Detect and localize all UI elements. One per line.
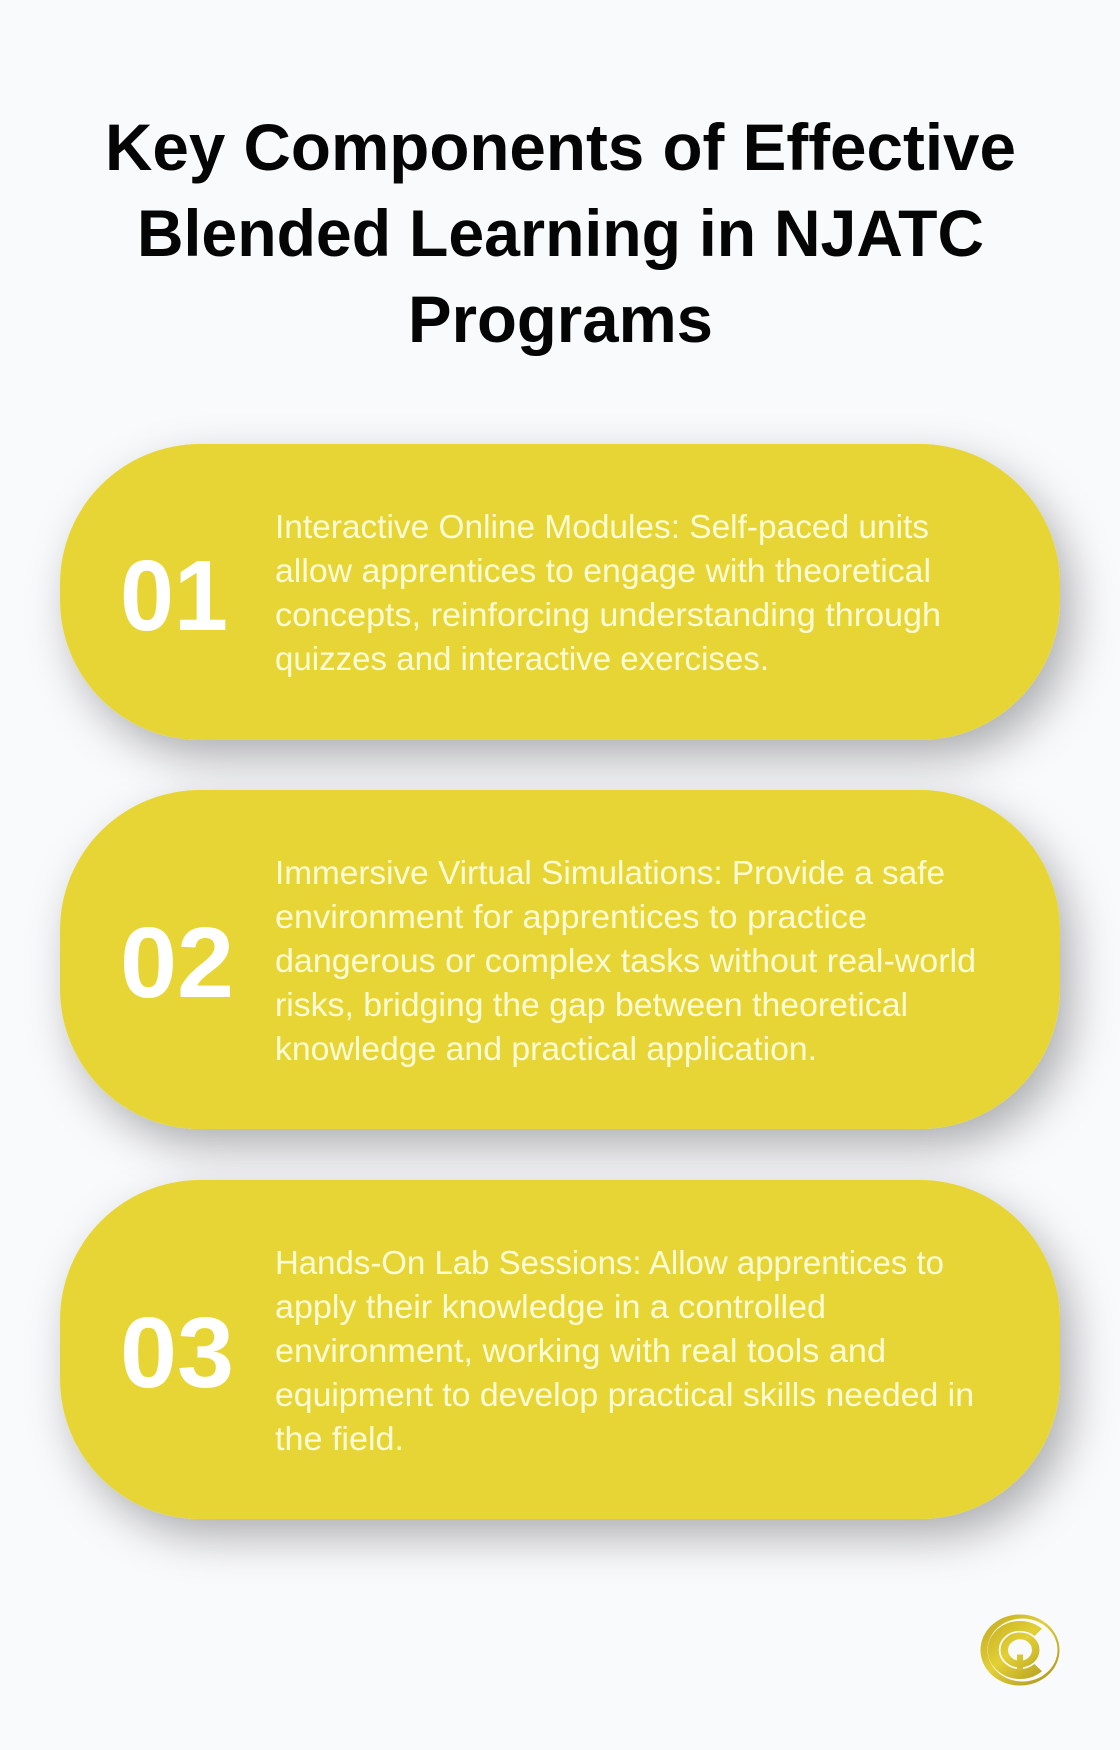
text block 03: environment, working with real tools and <box>275 1332 886 1369</box>
title: Programs <box>408 282 713 356</box>
text block 01 <box>275 508 941 677</box>
title: Key Components of Effective <box>105 110 1016 184</box>
text block 02: knowledge and practical application. <box>275 1030 817 1067</box>
number 02: 02 <box>120 907 234 1019</box>
panel: step 03 <box>60 1180 1060 1519</box>
text block 02: dangerous or complex tasks without real-world <box>275 942 976 979</box>
title <box>105 110 1016 356</box>
text block 03: apply their knowledge in a controlled <box>275 1288 826 1325</box>
number 01: 01 <box>120 540 228 652</box>
text block 02: environment for apprentices to practice <box>275 898 867 935</box>
text block 03: Hands-On Lab Sessions: Allow apprentices to <box>275 1244 944 1281</box>
icon: logo <box>980 1614 1060 1686</box>
text block 02: risks, bridging the gap between theoretical <box>275 986 908 1023</box>
text block 02: Immersive Virtual Simulations: Provide a safe <box>275 854 945 891</box>
text block 03 <box>275 1244 974 1457</box>
text block 03: equipment to develop practical skills needed in <box>275 1376 974 1413</box>
text block 01: allow apprentices to engage with theoretical <box>275 552 931 589</box>
text block 01: Interactive Online Modules: Self-paced units <box>275 508 929 545</box>
text block 01: concepts, reinforcing understanding through <box>275 596 941 633</box>
text block 02 <box>275 854 976 1067</box>
number 03: 03 <box>120 1297 234 1409</box>
text block 01: quizzes and interactive exercises. <box>275 640 769 677</box>
pill background 02 <box>60 790 1060 1129</box>
panel: step 02 <box>60 790 1060 1129</box>
title: Blended Learning in NJATC <box>137 196 984 270</box>
pill background 03 <box>60 1180 1060 1519</box>
pill background 01 <box>60 444 1060 740</box>
panel: step 01 <box>60 444 1060 740</box>
text block 03: the field. <box>275 1420 404 1457</box>
